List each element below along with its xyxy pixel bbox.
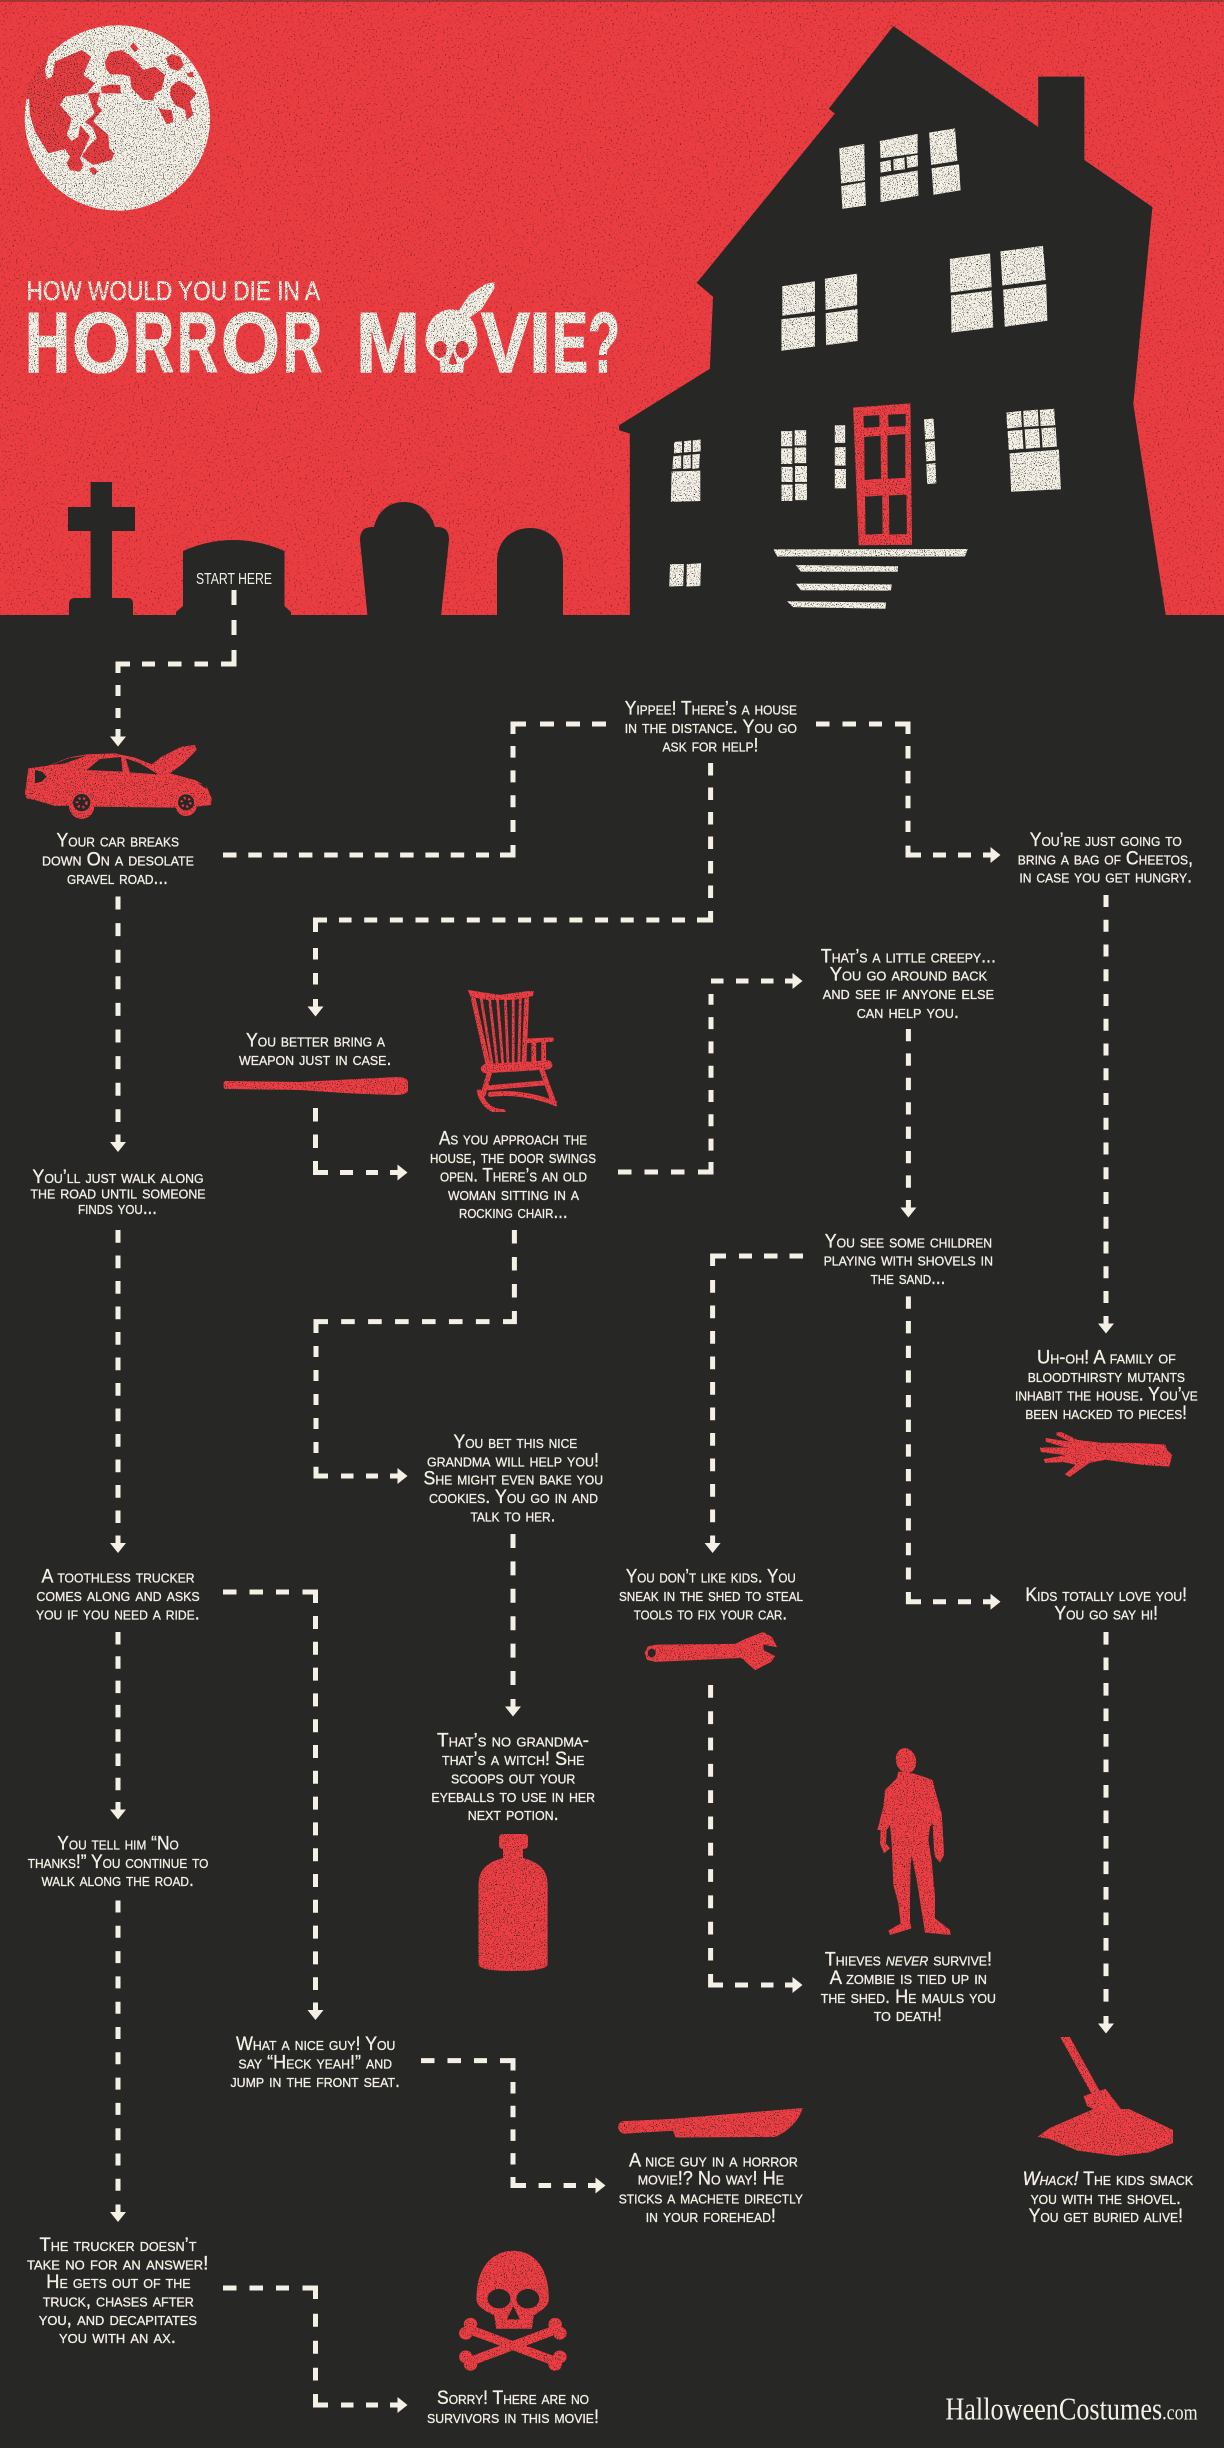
text: your car breaks down: gravel road... — [67, 868, 168, 889]
text: your car breaks down: Your car breaks — [56, 830, 179, 851]
text: mutants — [1015, 1348, 1198, 1424]
text: better bring a weapon — [239, 1030, 392, 1070]
text: trucker decapitates: He gets out of the — [46, 2272, 191, 2293]
text: thieves never survive — [821, 1950, 996, 2026]
icon: shovel in dirt mound — [1038, 2037, 1173, 2156]
text: nice guy: say “Heck yeah!” and — [238, 2052, 392, 2074]
text: witch: That’s no grandma- — [437, 1730, 589, 1751]
arrow: decapitated to no survivors — [223, 2288, 408, 2413]
text: as you approach the house: As you approach the — [439, 1128, 587, 1150]
text: steal tools: tools to fix your car. — [634, 1603, 787, 1624]
text: toothless trucker: A toothless trucker — [42, 1567, 194, 1588]
text: no survivors: survivors in this movie! — [427, 2407, 599, 2428]
text: nice grandma: You bet this nice — [454, 1432, 578, 1453]
text: nice guy: jump in the front seat. — [230, 2071, 400, 2092]
text: as you approach the house: rocking chair... — [459, 1202, 568, 1223]
background: red sky — [0, 0, 1224, 615]
text: whack: You get buried alive! — [1029, 2206, 1183, 2227]
text: steal tools — [619, 1567, 803, 1624]
icon: rocking chair — [468, 990, 557, 1112]
title: O — [72, 296, 131, 391]
arrow: trucker to no thanks — [110, 1632, 126, 1820]
text: walk along road — [30, 1167, 206, 1219]
text: as you approach the house: house, the door swings — [430, 1147, 596, 1168]
text: machete — [619, 2151, 803, 2227]
text: machete: sticks a machete directly — [619, 2188, 803, 2208]
text: nice grandma: She might even bake you — [424, 1469, 603, 1490]
text: as you approach the house — [430, 1128, 596, 1223]
text: yippee: ask for help! — [662, 736, 758, 756]
text: cheetos — [1018, 830, 1193, 888]
arrow: cheetos to mutants — [1098, 895, 1114, 1334]
text: witch — [431, 1730, 595, 1825]
logo: HalloweenCostumes.com: HalloweenCostumes.com — [945, 2390, 1198, 2426]
text: kids love you — [1025, 1585, 1187, 1624]
icon: small tombstone — [497, 528, 563, 616]
text: nice grandma: grandma will help you! — [427, 1450, 599, 1471]
title: I — [529, 296, 551, 391]
text: mutants: been hacked to pieces! — [1025, 1403, 1187, 1424]
arrow: walk along road — [110, 896, 126, 1152]
text: kids love you: You go say hi! — [1054, 1603, 1158, 1624]
text: trucker decapitates: you with an ax. — [59, 2327, 176, 2348]
text: your car breaks down — [42, 830, 194, 889]
arrow: children to say hi — [908, 1296, 1000, 1610]
text: children with shovels: You see some children — [825, 1231, 992, 1252]
text: children with shovels: playing with shovels in — [824, 1250, 993, 1271]
icon: red door — [853, 403, 912, 545]
text: kids love you: Kids totally love you! — [1025, 1585, 1187, 1606]
arrow: house to weapon — [308, 763, 711, 1016]
text: little creepy: You go around back — [830, 965, 987, 986]
text: as you approach the house: woman sitting in a — [448, 1184, 579, 1205]
icon: full moon — [23, 25, 210, 211]
text: witch: that’s a witch! She — [442, 1749, 585, 1770]
title: H — [25, 296, 70, 391]
text: toothless trucker — [36, 1567, 200, 1624]
text: witch: scoops out your — [451, 1768, 575, 1788]
text: toothless trucker: you if you need a ride. — [36, 1603, 200, 1624]
text: thieves never survive: Thieves never survive! — [825, 1950, 992, 1971]
arrow: kids to shovel — [1098, 1632, 1114, 2034]
icon: machete — [618, 2108, 803, 2138]
icon: start tombstone — [176, 540, 291, 616]
text: no thanks: walk along the road. — [42, 1870, 194, 1891]
text: nice grandma: talk to her. — [470, 1505, 556, 1526]
text: no thanks: thanks!” You continue to — [28, 1852, 208, 1873]
arrow: shed to zombie — [711, 1685, 802, 1993]
text: machete: movie!? No way! He — [638, 2169, 784, 2190]
text: steal tools: sneak in the shed to steal — [619, 1585, 803, 1606]
title: R — [177, 296, 218, 391]
text: cheetos: You’re just going to — [1030, 830, 1182, 851]
text: yippee — [625, 699, 797, 756]
text: no thanks — [28, 1833, 208, 1891]
text: whack: you with the shovel. — [1031, 2188, 1181, 2209]
text: nice guy — [230, 2034, 400, 2092]
text: trucker decapitates: truck, chases after — [43, 2291, 194, 2312]
text: no survivors — [427, 2388, 599, 2428]
icon: baseball bat — [224, 1077, 408, 1095]
text: little creepy: That’s a little creepy... — [821, 946, 996, 967]
title: HOW WOULD YOU DIE IN A — [26, 276, 320, 306]
text: whack — [1023, 2169, 1193, 2227]
arrow: rocking chair to nice grandma — [316, 1230, 514, 1484]
text: thieves never survive: the shed. He mauls you — [821, 1987, 996, 2008]
arrow: children to shed — [705, 1256, 803, 1553]
text: whack: Whack! The kids smack — [1023, 2169, 1193, 2190]
icon: car with open hood — [25, 745, 212, 819]
text: trucker decapitates: The trucker doesn’t — [40, 2235, 197, 2256]
text: mutants: bloodthirsty mutants — [1028, 1366, 1185, 1387]
arrow: road to trucker — [110, 1230, 126, 1553]
icon: haunted house — [619, 26, 1166, 617]
text: thieves never survive: A zombie is tied up in — [830, 1968, 987, 1989]
text: trucker decapitates — [27, 2235, 208, 2348]
title: E — [552, 296, 588, 391]
icon: rounded tombstone — [360, 502, 449, 616]
text: walk along road: the road until someone — [30, 1182, 206, 1204]
text: children with shovels — [824, 1231, 993, 1289]
icon: zombie — [877, 1746, 951, 1935]
text: trucker decapitates: you, and decapitates — [39, 2309, 197, 2330]
icon: cross gravestone — [68, 482, 135, 615]
text: thieves never survive: to death! — [874, 2005, 942, 2026]
icon: severed arm — [1040, 1432, 1172, 1477]
text: machete: A nice guy in a horror — [629, 2151, 798, 2172]
text: better bring a weapon: You better bring a — [246, 1030, 385, 1052]
text: trucker decapitates: take no for an answer! — [27, 2254, 208, 2274]
text: yippee: Yippee! There’s a house — [625, 699, 797, 720]
icon: skull and crossbones — [459, 2251, 567, 2371]
text: nice grandma — [424, 1432, 603, 1526]
text: witch: eyeballs to use in her — [431, 1786, 595, 1807]
arrow: around back to children — [900, 1029, 916, 1218]
text: cheetos: bring a bag of Cheetos, — [1018, 848, 1193, 869]
text: toothless trucker: comes along and asks — [36, 1585, 200, 1606]
text: walk along road: You’ll just walk along — [32, 1167, 204, 1188]
icon: wrench — [645, 1632, 777, 1670]
arrow: old woman to around back — [618, 973, 802, 1172]
text: no survivors: Sorry! There are no — [437, 2388, 589, 2409]
icon: potion bottle — [478, 1834, 548, 1971]
text: nice grandma: cookies. You go in and — [429, 1487, 598, 1508]
text: better bring a weapon: weapon just in case. — [239, 1049, 392, 1070]
text: steal tools: You don’t like kids. You — [626, 1567, 796, 1588]
arrow: trucker to front seat — [223, 1592, 324, 2020]
arrow: no thanks to decapitated — [110, 1900, 126, 2222]
arrow: start to car — [110, 590, 234, 746]
arrow: weapon to porch — [316, 1108, 408, 1180]
text: no thanks: You tell him “No — [57, 1833, 179, 1854]
text: your car breaks down: down On a desolate — [42, 850, 194, 870]
title: R — [133, 296, 174, 391]
arrow: car to house in the distance — [223, 724, 606, 855]
start label: START HERE — [196, 571, 272, 588]
text: children with shovels: the sand... — [871, 1268, 945, 1289]
arrow: front seat to machete — [421, 2061, 606, 2194]
text: cheetos: in case you get hungry. — [1019, 867, 1192, 888]
text: machete: in your forehead! — [646, 2206, 776, 2227]
text: mutants: inhabit the house. You’ve — [1015, 1384, 1198, 1406]
title: ? — [588, 296, 620, 391]
title: V — [481, 296, 530, 391]
text: walk along road: finds you... — [78, 1198, 157, 1219]
text: nice guy: What a nice guy! You — [236, 2034, 395, 2055]
arrow: nice grandma to witch — [505, 1534, 521, 1716]
text: little creepy: can help you. — [857, 1002, 959, 1023]
title: R — [283, 296, 322, 391]
arrow: house to cheetos — [816, 724, 1000, 863]
text: mutants: Uh-oh! A family of — [1037, 1348, 1176, 1369]
text: little creepy: and see if anyone else — [823, 983, 994, 1004]
title: O — [221, 296, 280, 391]
text: little creepy — [821, 946, 996, 1023]
text: as you approach the house: open. There’s an old — [440, 1166, 587, 1187]
icon: skull O with knife — [426, 282, 494, 373]
title — [25, 276, 620, 391]
title: M — [356, 296, 420, 391]
text: yippee: in the distance. You go — [625, 717, 797, 738]
text: witch: next potion. — [468, 1804, 559, 1825]
